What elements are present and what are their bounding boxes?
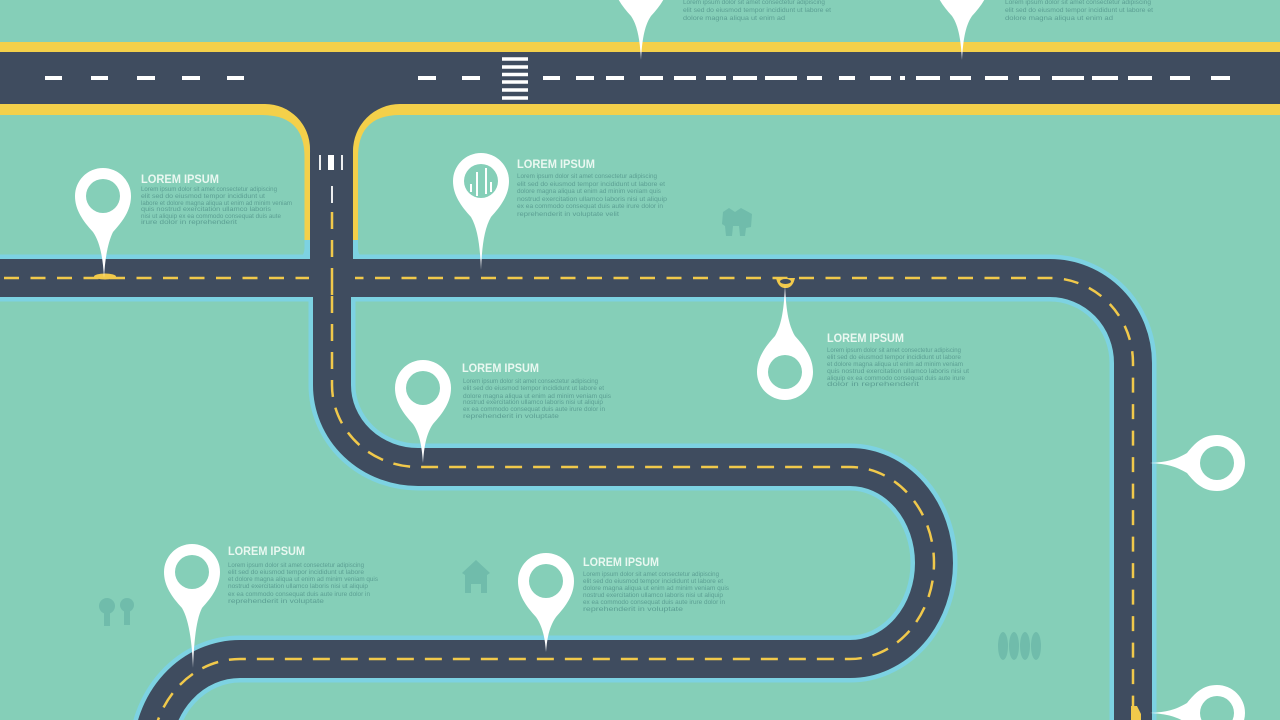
pin <box>453 153 509 270</box>
pin <box>75 168 131 278</box>
body text: et dolore magna aliqua ut enim ad minim veniam quis <box>228 577 378 583</box>
body text: ex ea commodo consequat duis aute irure dolor in <box>228 592 370 598</box>
stop: top centre <box>613 0 831 60</box>
stop 5 <box>164 544 378 668</box>
marker: car 3 <box>1131 706 1141 720</box>
pin: right upper <box>1150 435 1245 491</box>
text: dolore magna aliqua ut enim ad <box>683 16 785 22</box>
crosswalk <box>502 59 528 98</box>
body text <box>517 174 668 218</box>
pin <box>757 285 813 400</box>
body text: elit sed do eiusmod tempor incididunt ut <box>141 194 265 200</box>
icon: hedge <box>998 632 1041 660</box>
lower left yellow kerb <box>0 104 310 240</box>
body text: dolore magna aliqua ut enim ad minim veniam quis <box>463 394 611 400</box>
body text <box>141 187 292 226</box>
pin <box>164 544 220 668</box>
yellow centre lines <box>4 212 1133 720</box>
body text: nostrud exercitation ullamco laboris nisi ut aliquip <box>583 593 724 599</box>
pin <box>518 553 574 652</box>
body text <box>583 572 729 613</box>
stop 2 <box>453 153 668 270</box>
body text <box>463 379 611 420</box>
stop: top right <box>934 0 1153 60</box>
text <box>1005 0 1153 22</box>
icon: buildings <box>722 208 752 236</box>
text: Lorem ipsum dolor sit amet consectetur adipiscing <box>683 0 825 6</box>
body text: Lorem ipsum dolor sit amet consectetur adipiscing <box>141 187 277 193</box>
title: LOREM IPSUM <box>583 555 659 569</box>
body text: elit sed do eiusmod tempor incididunt ut labore <box>827 355 962 361</box>
body text: labore et dolore magna aliqua ut enim ad minim veniam <box>141 201 292 207</box>
main road centre line <box>4 278 1133 720</box>
stem centre white block <box>328 155 334 170</box>
marker: car 1 <box>94 274 116 280</box>
body text: elit sed do eiusmod tempor incididunt ut labore <box>228 570 365 576</box>
body text: Lorem ipsum dolor sit amet consectetur adipiscing <box>827 348 961 354</box>
title: LOREM IPSUM <box>141 172 219 186</box>
stop 4 <box>395 360 611 463</box>
icon: house <box>462 560 490 593</box>
body text: ex ea commodo consequat duis aute irure dolor in <box>583 600 725 606</box>
title: LOREM IPSUM <box>462 361 539 375</box>
body text: reprehenderit in voluptate <box>583 607 684 613</box>
pin <box>395 360 451 463</box>
stem white markings <box>320 155 342 203</box>
body text: reprehenderit in voluptate <box>228 599 325 605</box>
title: LOREM IPSUM <box>228 544 305 558</box>
body text <box>827 348 969 388</box>
junction blue edges <box>296 240 366 259</box>
body text: ex ea commodo consequat duis aute irure dolor in <box>463 407 605 413</box>
body text: dolore magna aliqua ut enim ad minim veniam quis <box>517 189 661 195</box>
stop 6 <box>518 553 729 652</box>
junction centre dash <box>331 268 333 295</box>
body text: dolore magna aliqua ut enim ad minim veniam quis <box>583 586 729 592</box>
junction road patch <box>309 262 355 296</box>
body text: elit sed do eiusmod tempor incididunt ut labore et <box>583 579 723 585</box>
body text: quis nostrud exercitation ullamco laboris nisi ut <box>827 369 969 375</box>
icon: street lamps in pin <box>471 168 491 196</box>
pin: right lower <box>1150 685 1245 720</box>
branch road <box>152 200 934 720</box>
lower right yellow kerb <box>353 104 1280 240</box>
body text: irure dolor in reprehenderit <box>141 220 237 226</box>
pin <box>934 0 990 60</box>
title: LOREM IPSUM <box>827 331 904 345</box>
pin <box>613 0 669 60</box>
stop 3 <box>757 285 969 400</box>
body text: reprehenderit in voluptate velit <box>517 212 619 218</box>
body text: nostrud exercitation ullamco laboris nisi ut aliquip <box>463 400 604 406</box>
white lane dashes <box>45 76 1230 80</box>
title: LOREM IPSUM <box>517 157 595 171</box>
body text: Lorem ipsum dolor sit amet consectetur adipiscing <box>228 563 364 569</box>
body text: nisi ut aliquip ex ea commodo consequat duis aute <box>141 214 282 220</box>
winding road <box>0 200 1133 720</box>
decorative icons group <box>99 208 1041 660</box>
car 2 window <box>780 279 791 284</box>
text: dolore magna aliqua ut enim ad <box>1005 16 1113 22</box>
body text: Lorem ipsum dolor sit amet consectetur adipiscing <box>583 572 719 578</box>
highway T surface <box>0 50 1280 262</box>
body text: reprehenderit in voluptate <box>463 414 560 420</box>
road halo <box>0 240 1133 720</box>
top yellow kerb <box>0 42 1280 52</box>
icon: trees <box>99 598 134 626</box>
body text: nostrud exercitation ullamco laboris nisi ut aliquip <box>228 584 369 590</box>
highway <box>0 42 1280 262</box>
text: Lorem ipsum dolor sit amet consectetur adipiscing <box>1005 0 1151 6</box>
body text: et dolore magna aliqua ut enim ad minim veniam <box>827 362 963 368</box>
body text: ex ea commodo consequat duis aute irure dolor in <box>517 204 663 210</box>
body text: aliquip ex ea commodo consequat duis aute irure <box>827 376 966 382</box>
body text: quis nostrud exercitation ullamco laboris <box>141 207 271 213</box>
body text: dolor in reprehenderit <box>827 382 920 388</box>
body text: elit sed do eiusmod tempor incididunt ut labore et <box>463 386 604 392</box>
text: elit sed do eiusmod tempor incididunt ut labore et <box>1005 8 1153 14</box>
stop 1 <box>75 168 292 278</box>
branch road centre line <box>152 212 934 720</box>
marker: car 2 <box>776 278 795 288</box>
body text: nostrud exercitation ullamco laboris nisi ut aliquip <box>517 197 668 203</box>
body text: elit sed do eiusmod tempor incididunt ut labore et <box>517 182 665 188</box>
body text <box>228 563 378 605</box>
car markers <box>94 274 1141 720</box>
text: elit sed do eiusmod tempor incididunt ut labore et <box>683 8 831 14</box>
body text: Lorem ipsum dolor sit amet consectetur adipiscing <box>463 379 598 385</box>
body text: Lorem ipsum dolor sit amet consectetur adipiscing <box>517 174 657 180</box>
text <box>683 0 831 22</box>
main road <box>0 278 1133 720</box>
